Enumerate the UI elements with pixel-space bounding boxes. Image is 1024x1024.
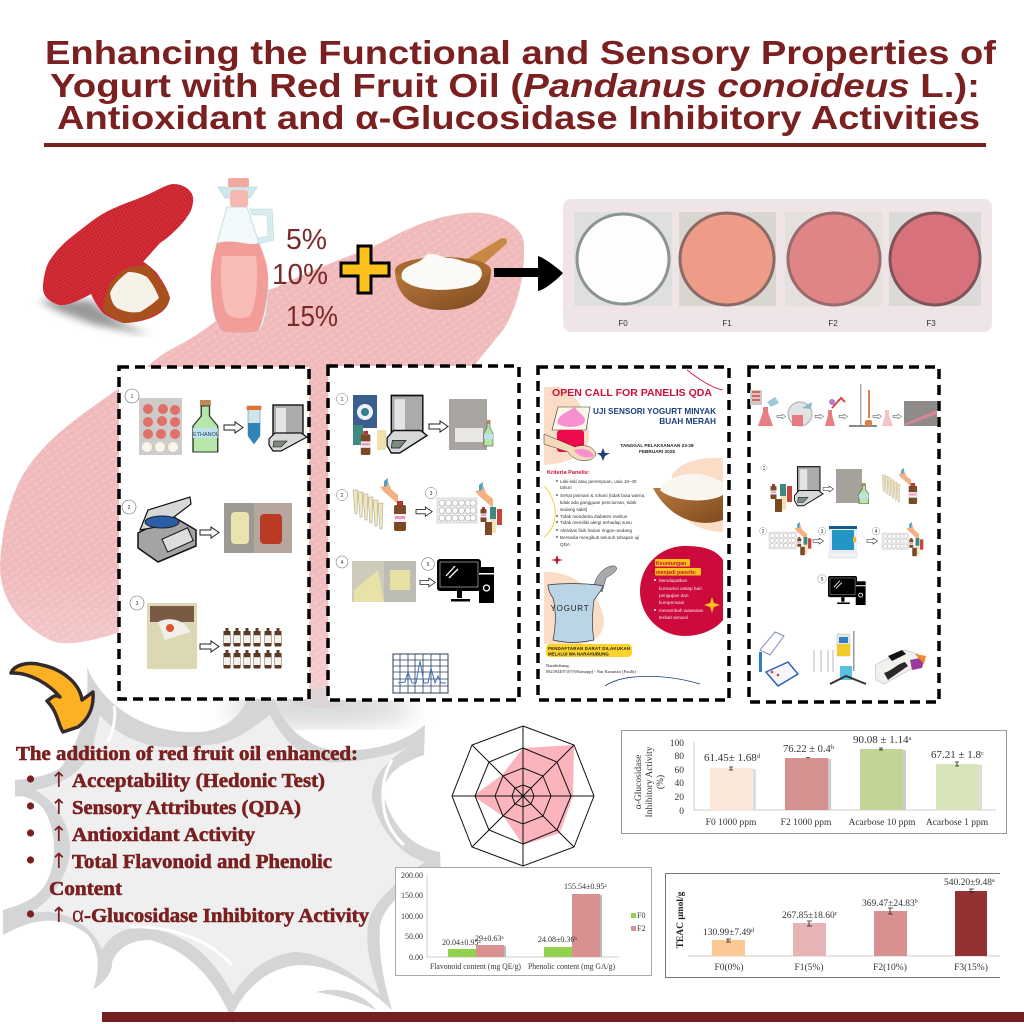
chart: flavonoid and phenolic content: 0.00 bbox=[409, 953, 423, 962]
chart: alpha-glucosidase inhibitory activity: a bbox=[909, 735, 912, 742]
panel: panelist recruitment poster: Laki-laki atau perempuan, usia 18–40 bbox=[560, 479, 637, 484]
panel: analysis workflow: 1 bbox=[341, 397, 344, 403]
panel: panelist recruitment poster: TANGGAL PELAKSANAAN 23-28 bbox=[620, 443, 694, 448]
chart: alpha-glucosidase inhibitory activity: 76.22 ± 0.4 bbox=[783, 744, 831, 755]
chart: alpha-glucosidase inhibitory activity: 0 bbox=[679, 807, 684, 817]
text block: key findings: Content bbox=[49, 878, 122, 900]
percent labels: 10% bbox=[272, 259, 328, 291]
panel: yogurt samples: F3 bbox=[926, 319, 936, 328]
panel: extraction workflow: ETHANOL bbox=[193, 432, 219, 438]
percent labels bbox=[272, 224, 338, 333]
chart: alpha-glucosidase inhibitory activity: F0 1000 ppm bbox=[706, 818, 757, 828]
panel: panelist recruitment poster: menambah wawasan bbox=[659, 608, 704, 613]
chart: TEAC antioxidant activity: F0(0%) bbox=[714, 962, 744, 973]
chart: flavonoid and phenolic content: 200.00 bbox=[401, 871, 423, 880]
panel: panelist recruitment poster bbox=[538, 367, 729, 700]
panel: panelist recruitment poster: MELALUI WA NARAHUBUNG bbox=[548, 652, 609, 656]
chart: flavonoid and phenolic content: Flavonoid content (mg QE/g) bbox=[430, 962, 521, 971]
panel: yogurt samples: F0 bbox=[618, 319, 628, 328]
chart: flavonoid and phenolic content: F0 bbox=[637, 911, 645, 920]
text block: key findings: Antioxidant Activity bbox=[72, 824, 256, 846]
panel: analysis workflow: 4 bbox=[341, 560, 344, 566]
chart: TEAC antioxidant activity: 130.99±7.49 bbox=[703, 928, 751, 938]
chart: flavonoid and phenolic content: F2 bbox=[637, 924, 645, 933]
background: pale red fruit bbox=[0, 213, 524, 708]
chart: TEAC antioxidant activity: F2(10%) bbox=[873, 962, 907, 973]
chart: alpha-glucosidase inhibitory activity: α-Glucosidase bbox=[634, 755, 644, 809]
panel: panelist recruitment poster: Tidak memiliki alergi terhadap susu bbox=[560, 520, 632, 525]
icon: oil bottle bbox=[211, 178, 274, 332]
panel: panelist recruitment poster: OPEN CALL FOR PANELIS QDA bbox=[552, 388, 713, 399]
text block: key findings: ↑ bbox=[50, 849, 68, 873]
text block: key findings: -Glucosidase Inhibitory Activity bbox=[84, 905, 370, 927]
title: Enhancing the Functional and Sensory Properties of bbox=[45, 34, 997, 71]
title: Antioxidant and α-Glucosidase Inhibitory Activities bbox=[57, 99, 980, 136]
panel: panelist recruitment poster: PENDAFTARAN DARAT DILAKUKAN bbox=[548, 646, 630, 651]
panel: yogurt samples: F1 bbox=[722, 319, 732, 328]
chart: TEAC antioxidant activity: 267.85±18.60 bbox=[782, 911, 835, 921]
chart: alpha-glucosidase inhibitory activity: F2 1000 ppm bbox=[781, 818, 832, 828]
text block: key findings: Sensory Attributes (QDA) bbox=[72, 797, 301, 819]
panel: extraction workflow: 1 bbox=[131, 394, 134, 400]
chart: TEAC antioxidant activity: a bbox=[992, 878, 995, 884]
panel: panelist recruitment poster: konsumsi setiap hari bbox=[659, 586, 702, 591]
chart: flavonoid and phenolic content: 29±0.63 bbox=[475, 934, 501, 943]
chart: flavonoid and phenolic content: a bbox=[478, 940, 481, 945]
icon: orange curved arrow bbox=[11, 663, 93, 732]
chart: alpha-glucosidase inhibitory activity: 61.45± 1.68 bbox=[704, 752, 757, 764]
background: gray paint splash bbox=[3, 667, 441, 1024]
icon: yogurt bowl bbox=[395, 238, 507, 310]
panel: panelist recruitment poster: Aktivitas fisik harian ringan–sedang bbox=[560, 528, 632, 533]
icon: yellow plus bbox=[341, 246, 389, 293]
chart: alpha-glucosidase inhibitory activity: 90.08 ± 1.14 bbox=[853, 734, 909, 746]
panel: analysis workflow: 3 bbox=[430, 491, 433, 497]
chart: alpha-glucosidase inhibitory activity: Acarbose 10 ppm bbox=[848, 818, 916, 828]
panel: panelist recruitment poster: sedang sakit) bbox=[560, 507, 588, 512]
chart: flavonoid and phenolic content: a bbox=[501, 936, 504, 941]
text block: key findings: ↑ bbox=[50, 768, 68, 792]
text block: key findings bbox=[16, 743, 370, 927]
panel: testing workflow: 5 bbox=[821, 577, 824, 583]
chart: alpha-glucosidase inhibitory activity: d bbox=[757, 753, 761, 760]
chart: alpha-glucosidase inhibitory activity: 20 bbox=[674, 793, 684, 803]
text block: key findings: ↑ bbox=[50, 795, 68, 819]
chart: alpha-glucosidase inhibitory activity: 100 bbox=[670, 739, 684, 749]
panel: panelist recruitment poster: UJI SENSORI YOGURT MINYAK bbox=[593, 406, 716, 416]
panel: panelist recruitment poster: Narahubung: bbox=[546, 663, 570, 668]
chart: alpha-glucosidase inhibitory activity: 60 bbox=[674, 766, 684, 776]
chart: TEAC antioxidant activity bbox=[666, 874, 1000, 978]
panel: panelist recruitment poster: pengujian dan bbox=[659, 593, 689, 598]
panel: yogurt samples bbox=[563, 199, 992, 332]
panel: panelist recruitment poster: tidak ada gangguan penciuman, tidak bbox=[560, 500, 637, 505]
chart: TEAC antioxidant activity: 540.20±9.48 bbox=[944, 878, 992, 888]
chart: alpha-glucosidase inhibitory activity: (%) bbox=[655, 775, 666, 789]
panel: extraction workflow: 2 bbox=[128, 505, 131, 511]
panel: panelist recruitment poster: menjadi panelis: bbox=[656, 570, 697, 576]
chart: alpha-glucosidase inhibitory activity: c bbox=[981, 750, 984, 757]
percent labels: 15% bbox=[286, 301, 338, 333]
chart: TEAC antioxidant activity: c bbox=[835, 911, 838, 917]
panel: testing workflow bbox=[749, 367, 939, 702]
panel: testing workflow: 4 bbox=[875, 529, 878, 535]
panel: panelist recruitment poster: BUAH MERAH bbox=[659, 416, 716, 426]
background: gray shadow under fruit bbox=[225, 690, 415, 726]
chart: alpha-glucosidase inhibitory activity: 40 bbox=[674, 779, 684, 789]
chart: alpha-glucosidase inhibitory activity: 67.21 ± 1.8 bbox=[931, 749, 981, 761]
panel: panelist recruitment poster: Sehat jasmani & rohani (tidak buta warna, bbox=[560, 493, 645, 498]
chart: flavonoid and phenolic content: 50.00 bbox=[405, 932, 423, 941]
chart: alpha-glucosidase inhibitory activity: Inhibitory Activity bbox=[645, 746, 655, 817]
panel: panelist recruitment poster: YOGURT bbox=[551, 604, 589, 613]
panel: panelist recruitment poster: Keuntungan bbox=[656, 561, 686, 567]
arrow: to yogurt samples bbox=[494, 256, 563, 291]
text block: key findings: α bbox=[72, 904, 84, 927]
chart: flavonoid and phenolic content: a bbox=[604, 884, 607, 889]
chart: alpha-glucosidase inhibitory activity: b bbox=[831, 744, 834, 751]
chart: flavonoid and phenolic content bbox=[396, 868, 652, 976]
text block: key findings: Acceptability (Hedonic Test) bbox=[72, 770, 325, 792]
chart: alpha-glucosidase inhibitory activity: 80 bbox=[674, 752, 684, 762]
title: Yogurt with Red Fruit Oil ( Pandanus conoideus L.): bbox=[50, 67, 980, 104]
chart: alpha-glucosidase inhibitory activity: Acarbose 1 ppm bbox=[926, 818, 989, 828]
panel: yogurt samples: F2 bbox=[828, 319, 838, 328]
chart: flavonoid and phenolic content: 155.54±0.95 bbox=[564, 882, 604, 891]
percent labels: 5% bbox=[286, 224, 327, 256]
text block: key findings: ↑ bbox=[50, 822, 68, 846]
chart: TEAC antioxidant activity: TEAC μmol/g bbox=[676, 891, 686, 948]
panel: panelist recruitment poster: terkait sensori bbox=[659, 615, 688, 620]
text block: key findings: ↑ bbox=[50, 903, 68, 927]
icon: red fruit bbox=[38, 184, 193, 335]
panel: panelist recruitment poster: kompensasi bbox=[659, 600, 684, 605]
chart: flavonoid and phenolic content: Phenolic content (mg GA/g) bbox=[528, 962, 615, 971]
chart: TEAC antioxidant activity: F3(15%) bbox=[954, 962, 988, 973]
panel: panelist recruitment poster: Kriteria Panelis: bbox=[547, 470, 590, 476]
chart: TEAC antioxidant activity: b bbox=[915, 899, 918, 905]
panel: analysis workflow: 2 bbox=[341, 493, 344, 499]
panel: extraction workflow bbox=[119, 367, 309, 699]
chart: TEAC antioxidant activity: 369.47±24.83 bbox=[862, 899, 915, 909]
text block: key findings: The addition of red fruit oil enhanced: bbox=[16, 743, 358, 765]
chart: flavonoid and phenolic content: 150.00 bbox=[401, 891, 423, 900]
panel: panelist recruitment poster: Tidak menderita diabetes melitus bbox=[560, 514, 628, 519]
panel: testing workflow: 3 bbox=[821, 529, 824, 535]
chart: flavonoid and phenolic content: b bbox=[574, 937, 577, 942]
panel: panelist recruitment poster: QDA bbox=[560, 542, 571, 547]
chart: flavonoid and phenolic content: 24.08±0.36 bbox=[538, 935, 574, 944]
chart: flavonoid and phenolic content: 20.04±0.95 bbox=[442, 938, 478, 947]
title bbox=[45, 34, 997, 136]
panel: analysis workflow: 5 bbox=[427, 562, 430, 568]
chart: TEAC antioxidant activity: d bbox=[751, 928, 754, 934]
text block: key findings: Total Flavonoid and Phenolic bbox=[72, 851, 332, 873]
footer bar bbox=[102, 1012, 1024, 1022]
chart: TEAC antioxidant activity: F1(5%) bbox=[794, 962, 824, 973]
panel: panelist recruitment poster: Bersedia mengikuti seluruh tahapan uji bbox=[560, 535, 639, 540]
panel: testing workflow: 1 bbox=[763, 466, 766, 472]
chart: alpha-glucosidase inhibitory activity bbox=[622, 730, 1006, 834]
chart: sensory radar bbox=[452, 726, 594, 866]
panel: analysis workflow bbox=[328, 366, 519, 700]
panel: panelist recruitment poster: tahun bbox=[560, 485, 572, 490]
panel: testing workflow: 2 bbox=[762, 529, 765, 535]
panel: extraction workflow: 3 bbox=[136, 601, 139, 607]
panel: panelist recruitment poster: FEBRUARI 2025 bbox=[639, 449, 675, 454]
title underline bbox=[44, 143, 986, 147]
panel: panelist recruitment poster: 082394497107(Whatsapp) - Nur Kusmiati (Pasilit) bbox=[546, 669, 637, 674]
panel: panelist recruitment poster: Mendapatkan bbox=[659, 578, 688, 583]
chart: flavonoid and phenolic content: 100.00 bbox=[401, 912, 423, 921]
